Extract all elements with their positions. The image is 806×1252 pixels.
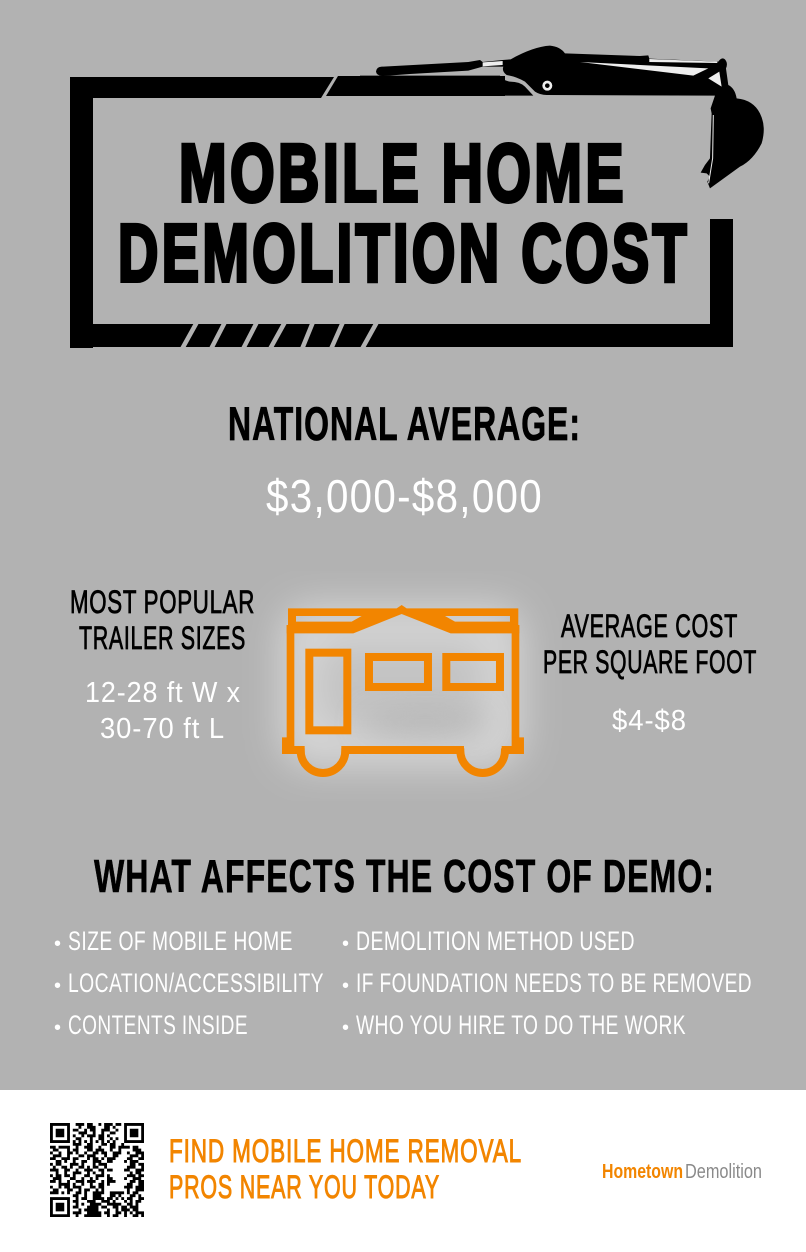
icon: excavator arm — [360, 46, 764, 188]
call to action — [169, 1133, 522, 1205]
cost factors list: • — [54, 933, 62, 955]
heading: trailer sizes — [70, 584, 255, 656]
trailer size values — [85, 677, 241, 745]
cost factors list: CONTENTS INSIDE — [68, 1010, 248, 1040]
heading: trailer sizes: TRAILER SIZES — [79, 620, 246, 656]
trailer sizes — [70, 584, 255, 745]
frame — [70, 76, 733, 349]
logo: Hometown Demolition: Demolition — [685, 1161, 762, 1183]
title: MOBILE HOME — [179, 128, 627, 219]
title — [118, 128, 690, 299]
footer panel — [0, 1090, 806, 1252]
cost factors list: • — [54, 975, 62, 997]
glow behind trailer — [298, 622, 506, 750]
cost per square foot — [543, 608, 757, 737]
cost per square foot value: $4-$8 — [612, 705, 687, 737]
logo: Hometown Demolition: Hometown — [602, 1161, 683, 1183]
trailer size values: 30-70 ft L — [100, 713, 225, 745]
icon: mobile home trailer — [282, 605, 524, 773]
heading: trailer sizes: MOST POPULAR — [70, 584, 255, 620]
call to action: FIND MOBILE HOME REMOVAL — [169, 1133, 522, 1169]
cost factors list: SIZE OF MOBILE HOME — [68, 926, 293, 956]
cost factors list: • — [342, 933, 350, 955]
logo: Hometown Demolition — [602, 1161, 762, 1183]
national average — [228, 397, 581, 522]
QR code — [50, 1124, 150, 1216]
cost factors list: LOCATION/ACCESSIBILITY — [68, 968, 324, 998]
cost factors list: • — [342, 1017, 350, 1039]
cost factors list — [54, 926, 752, 1040]
call to action: PROS NEAR YOU TODAY — [169, 1169, 440, 1205]
national average value: $3,000-$8,000 — [266, 470, 543, 522]
cost factors list: • — [54, 1017, 62, 1039]
title frame with excavator — [70, 46, 764, 349]
cost factors list: DEMOLITION METHOD USED — [356, 926, 635, 956]
heading: national average: NATIONAL AVERAGE: — [228, 397, 581, 450]
cost factors list: • — [342, 975, 350, 997]
trailer size values: 12-28 ft W x — [85, 677, 241, 709]
what affects the cost — [54, 850, 752, 1040]
heading: cost per square foot — [543, 608, 757, 680]
